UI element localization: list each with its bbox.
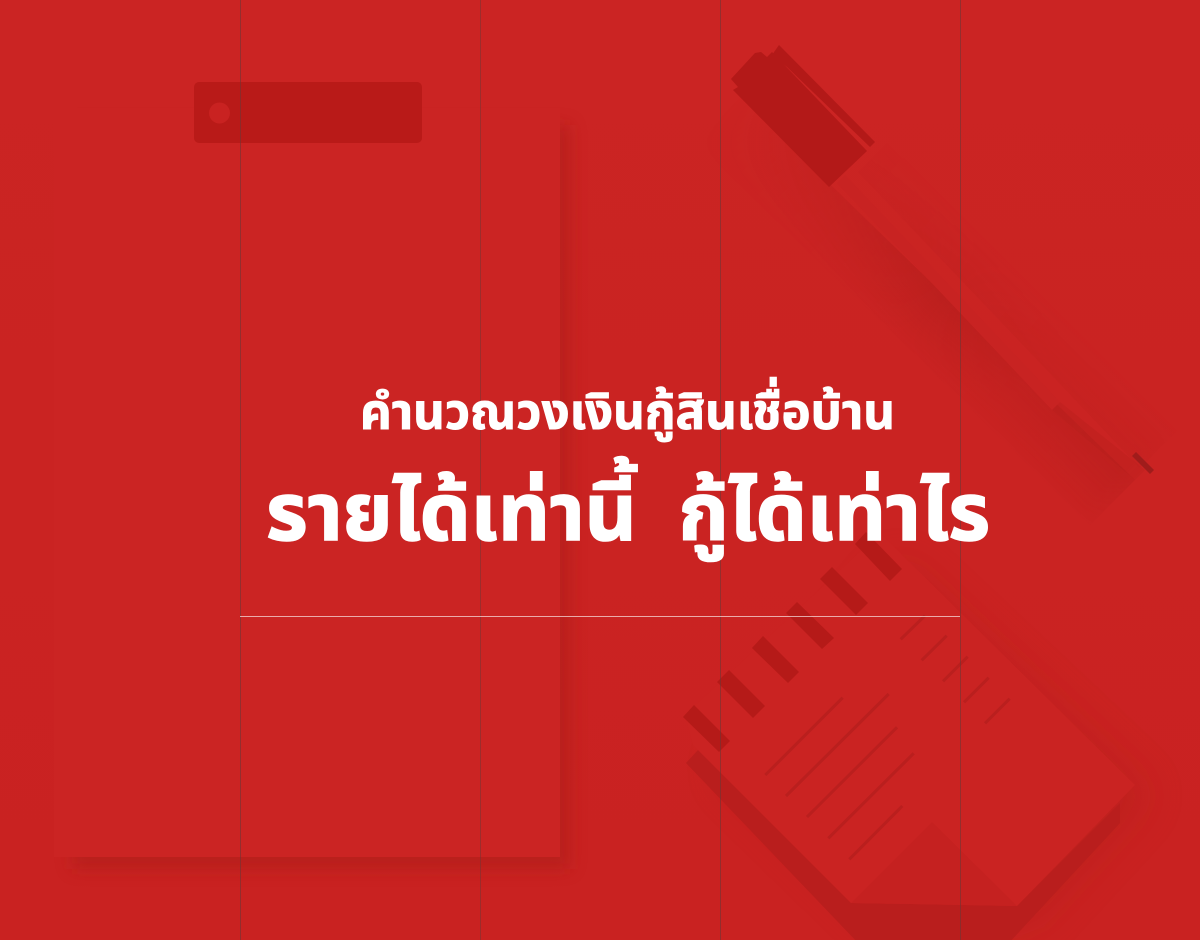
pen body stripe — [837, 175, 1060, 410]
pen lower shadow — [856, 214, 1134, 486]
clipboard tag — [194, 82, 422, 143]
pen — [731, 45, 1154, 486]
pen tip — [1132, 452, 1154, 474]
clipboard tag hole — [209, 102, 230, 124]
divider — [240, 616, 960, 617]
pen cap — [731, 52, 867, 187]
title line 1: คำนวณวงเงินกู้สินเชื่อบ้าน — [360, 376, 895, 452]
clipboard — [54, 82, 570, 869]
notepad fold — [851, 822, 1017, 906]
notepad — [683, 532, 1150, 940]
pen barrel end shading — [1124, 469, 1125, 470]
notepad page — [685, 533, 1135, 906]
notepad shadow — [720, 560, 1150, 925]
clipboard shadow — [72, 125, 570, 869]
pen upper shadow — [858, 132, 1180, 468]
pen clip — [772, 45, 875, 147]
vertical grid lines — [240, 0, 960, 940]
title line 2: รายได้เท่านี้ กู้ได้เท่าไร — [266, 455, 990, 576]
pen shadows — [856, 214, 1140, 486]
text lines — [765, 616, 1010, 859]
clipboard board — [54, 108, 560, 857]
binding blocks — [683, 532, 902, 752]
notepad back page — [686, 750, 1120, 940]
